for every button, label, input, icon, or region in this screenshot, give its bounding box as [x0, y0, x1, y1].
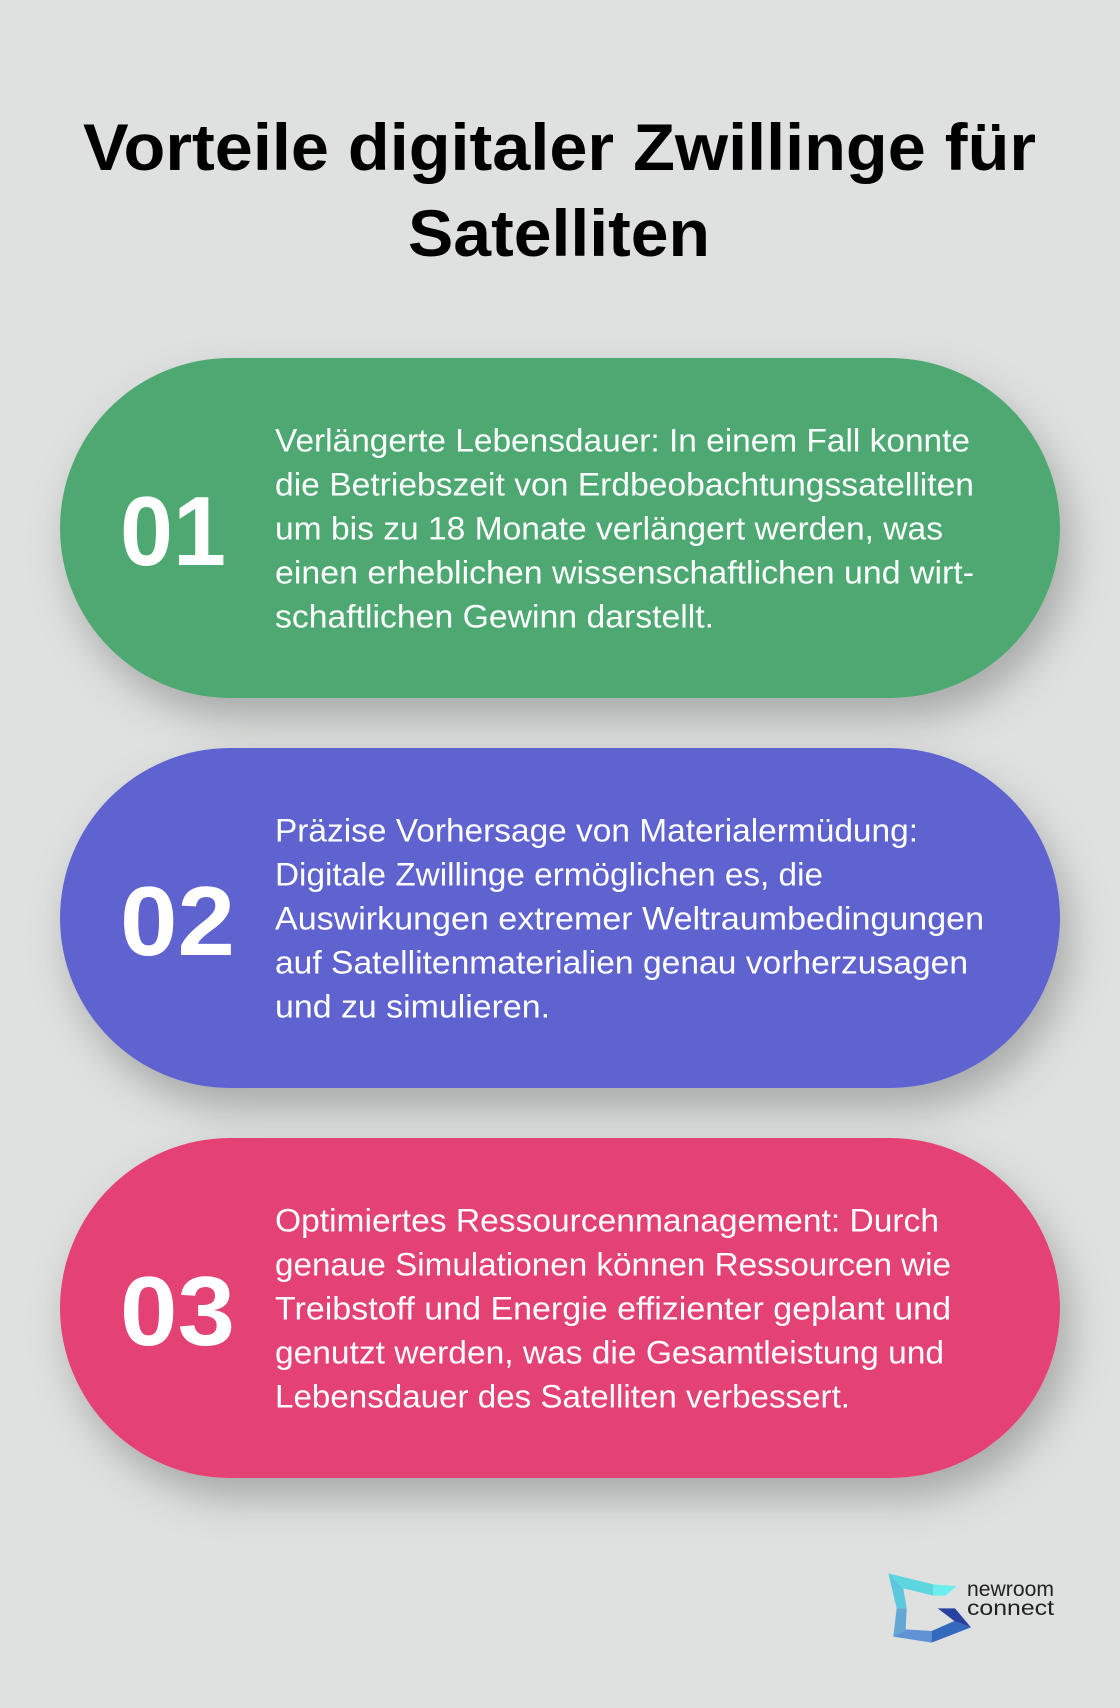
logo wordmark: [967, 1578, 1054, 1620]
card 03 background: [60, 1138, 1060, 1478]
card 01 text: um bis zu 18 Monate verlängert werden, was: [275, 510, 943, 546]
panel: card 03: [60, 1138, 1060, 1478]
card 02 text: Auswirkungen extremer Weltraumbedingungen: [275, 900, 984, 936]
card 01 text: [275, 422, 974, 634]
card 02 text: [275, 812, 984, 1024]
card 02 text: auf Satellitenmaterialien genau vorherzusagen: [275, 944, 968, 980]
title: [83, 110, 1036, 270]
card 03 text: genaue Simulationen können Ressourcen wie: [275, 1246, 951, 1282]
card 01 text: schaftlichen Gewinn darstellt.: [275, 598, 714, 634]
card 02 background: [60, 748, 1060, 1088]
title: Vorteile digitaler Zwillinge für: [83, 110, 1036, 184]
card 01 background: [60, 358, 1060, 698]
panel: card 01: [60, 358, 1060, 698]
card 03 text: genutzt werden, was die Gesamtleistung und: [275, 1334, 944, 1370]
card 03 text: Lebensdauer des Satelliten verbessert.: [275, 1378, 850, 1414]
card 02 text: Präzise Vorhersage von Materialermüdung:: [275, 812, 918, 848]
card 02 text: Digitale Zwillinge ermöglichen es, die: [275, 856, 823, 892]
card 01 text: die Betriebszeit von Erdbeobachtungssatelliten: [275, 466, 974, 502]
card 01 text: einen erheblichen wissenschaftlichen und wirt-: [275, 554, 974, 590]
logo wordmark: connect: [967, 1597, 1054, 1620]
number 02: 02: [120, 866, 235, 976]
card 02 text: und zu simulieren.: [275, 988, 550, 1024]
panel: card 02: [60, 748, 1060, 1088]
card 03 text: Optimiertes Ressourcenmanagement: Durch: [275, 1202, 939, 1238]
card 03 text: [275, 1202, 951, 1414]
icon: logo mark: [888, 1573, 971, 1643]
title: Satelliten: [408, 196, 710, 270]
logo: newroom connect: [888, 1573, 1054, 1643]
logo wordmark: newroom: [967, 1578, 1054, 1601]
card 03 text: Treibstoff und Energie effizienter geplant und: [275, 1290, 951, 1326]
number 03: 03: [120, 1256, 235, 1366]
number 01: 01: [120, 476, 226, 586]
card 01 text: Verlängerte Lebensdauer: In einem Fall konnte: [275, 422, 970, 458]
